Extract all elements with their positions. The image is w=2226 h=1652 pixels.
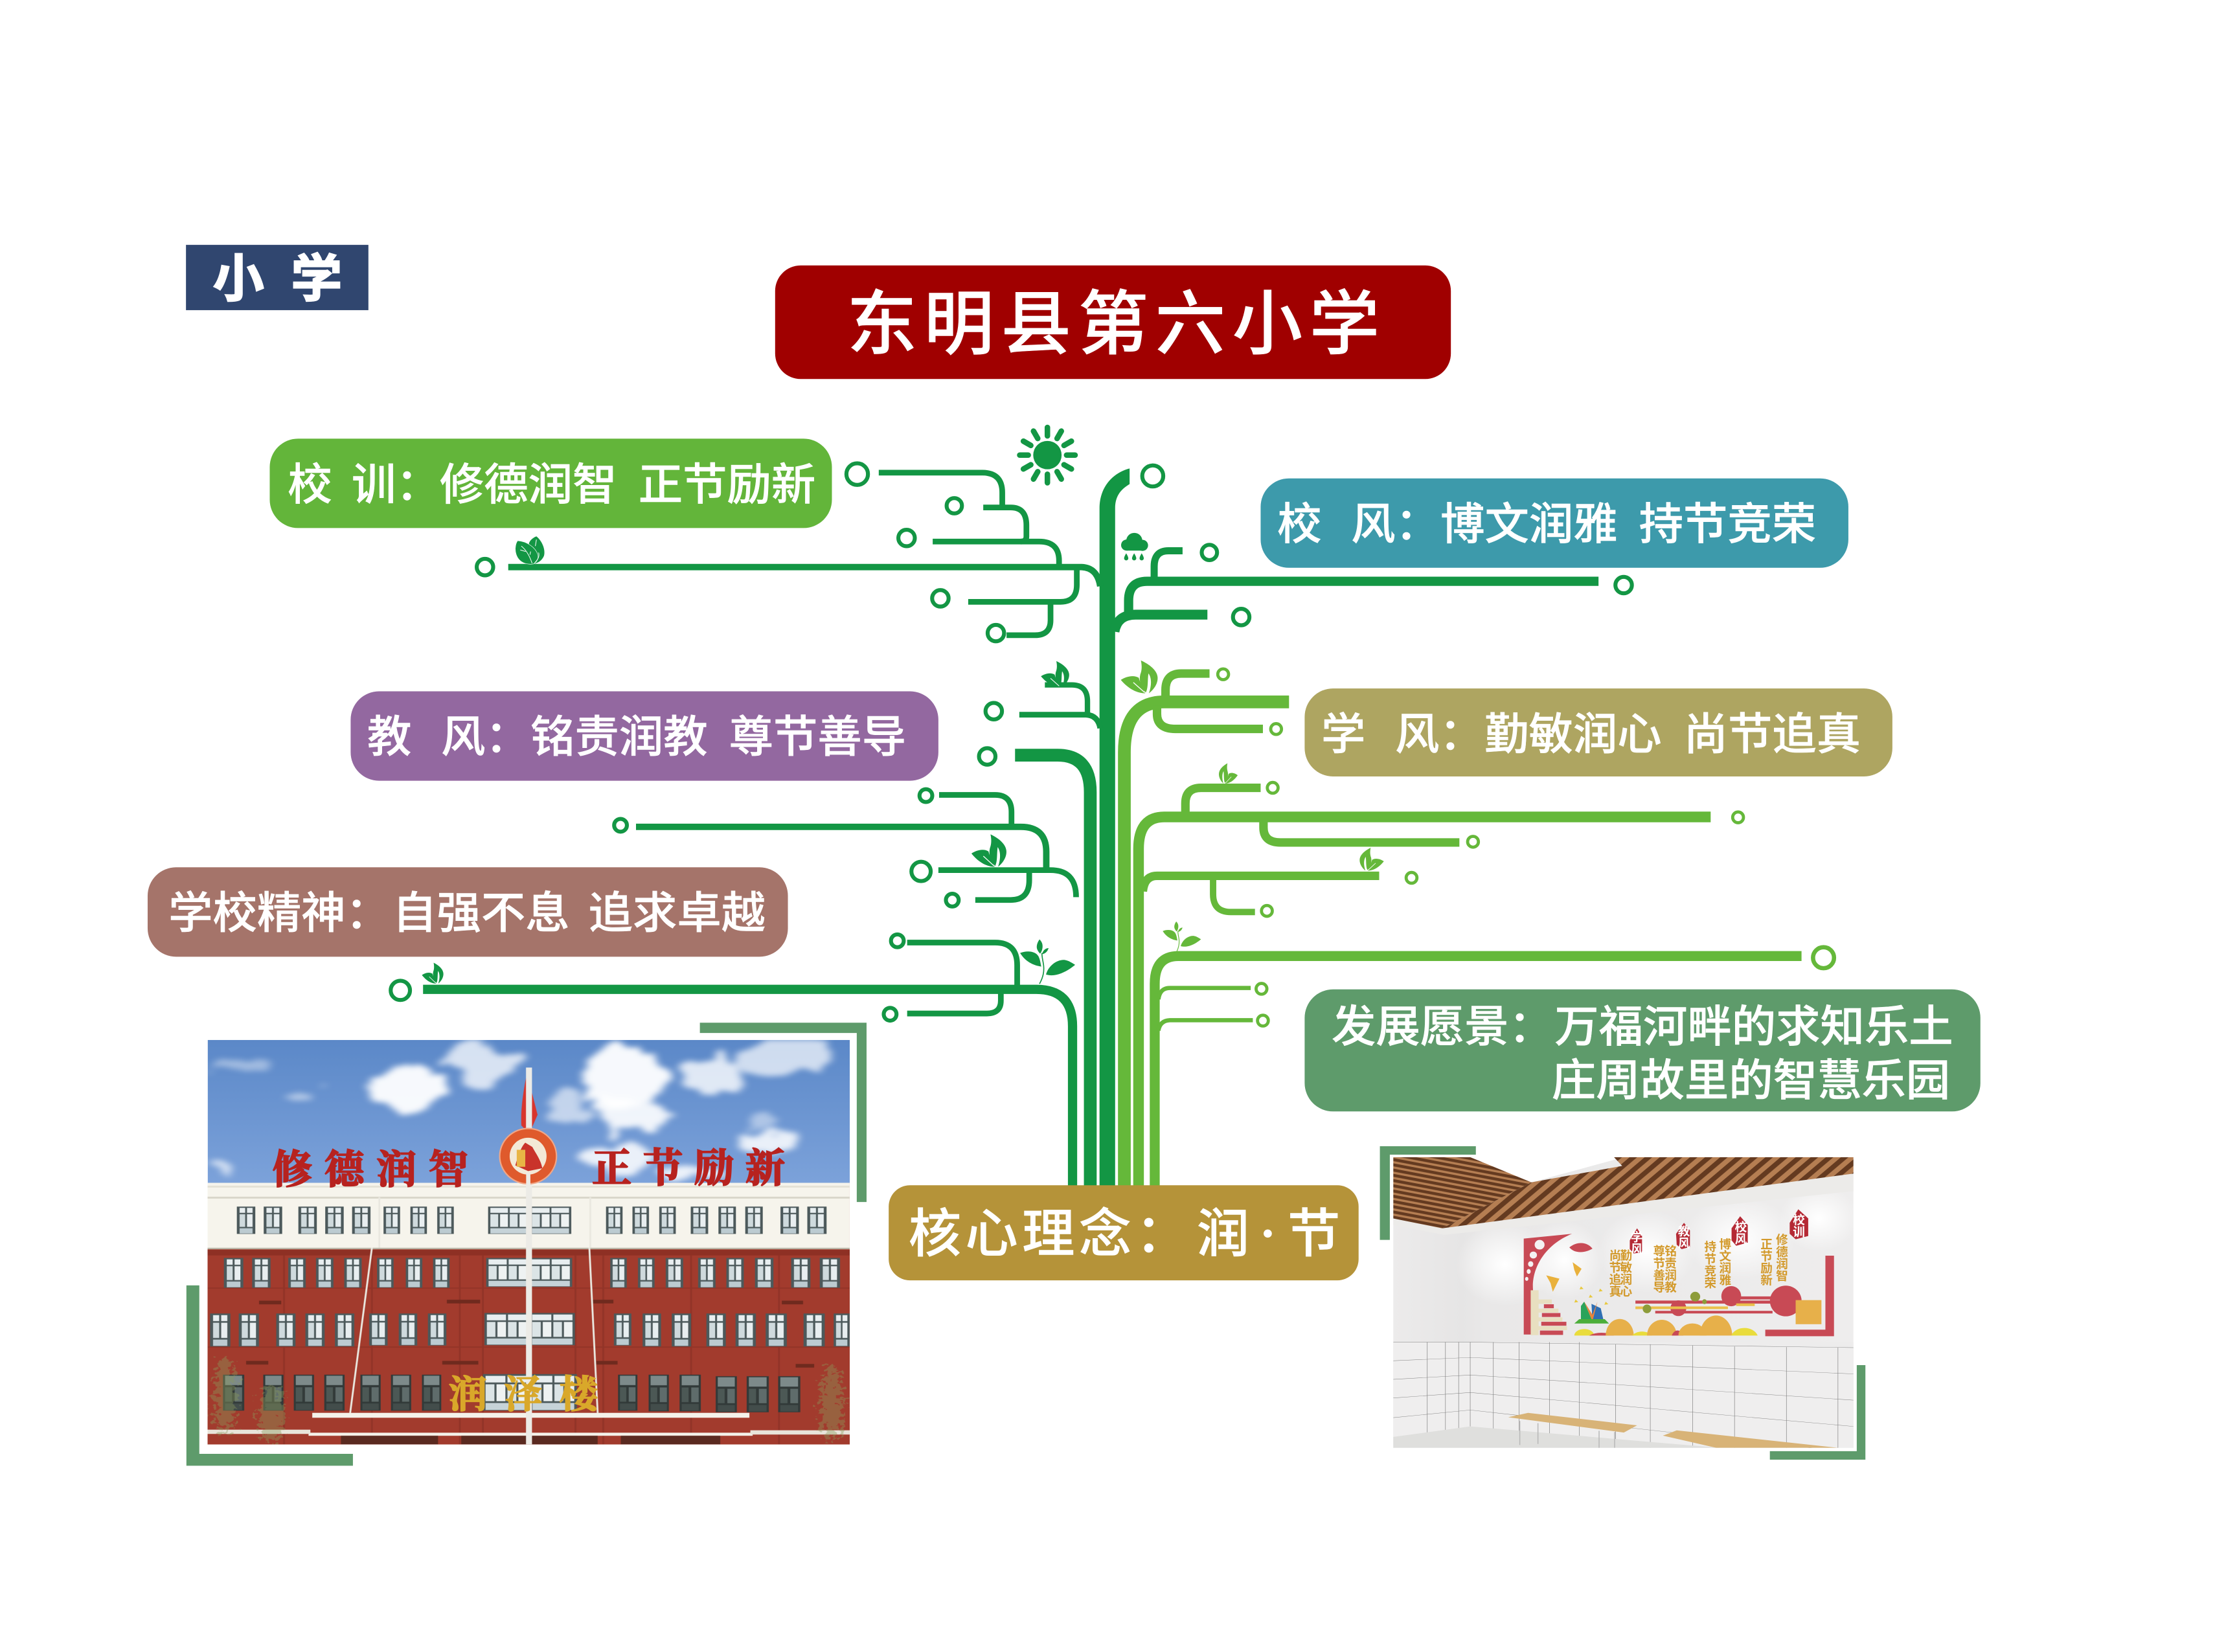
- photo sign: plates and vertical slogans: 校训: [1791, 1214, 1805, 1238]
- label: study style: 学: [1321, 710, 1365, 759]
- photo sign: building name: 润泽楼: [449, 1373, 615, 1416]
- label: school motto: 校: [288, 460, 332, 510]
- label: school ethos: 持节竞荣: [1639, 500, 1816, 549]
- photo sign: plates and vertical slogans: [1607, 1214, 1805, 1297]
- label: school spirit: [148, 867, 788, 956]
- label: teaching style: 教: [367, 713, 411, 762]
- label: teaching style: [350, 691, 938, 781]
- label: teaching style: 铭责润教: [530, 713, 708, 762]
- frame: building photo top right: [700, 1023, 867, 1202]
- label: study style: 风：: [1395, 710, 1484, 759]
- label: school ethos: [1260, 479, 1848, 568]
- label: development vision: 发展愿景：: [1332, 1002, 1553, 1052]
- photo sign: plates and vertical slogans: 修德润智: [1775, 1234, 1788, 1282]
- label: development vision: 万福河畔的求知乐土: [1554, 1002, 1953, 1052]
- label: study style: 尚节追真: [1684, 710, 1861, 759]
- label: study style: 勤敏润心: [1484, 710, 1662, 759]
- photo sign: plates and vertical slogans: 学风: [1630, 1230, 1643, 1255]
- icon: sun: [1019, 427, 1075, 482]
- label: core concept: 润: [1197, 1205, 1249, 1263]
- label: school motto: 修德润智: [440, 460, 617, 510]
- label: study style: [1304, 688, 1892, 776]
- photo sign: plates and vertical slogans: 博文润雅: [1718, 1238, 1731, 1286]
- label: school motto: 正节励新: [639, 460, 815, 510]
- tree: light green trunks and branches: [1124, 673, 1802, 1186]
- photo sign: plates and vertical slogans: 校风: [1733, 1220, 1747, 1245]
- icon: rain cloud: [1121, 533, 1148, 560]
- label: core concept: [889, 1185, 1359, 1280]
- label: school motto: [269, 438, 832, 528]
- label: school spirit: 追求卓越: [589, 889, 766, 938]
- label: teaching style: 风：: [441, 713, 530, 762]
- label: core concept: 核心理念：: [909, 1205, 1192, 1263]
- photo: culture wall: [1393, 1157, 1858, 1453]
- title: 东明县第六小学: [847, 285, 1387, 363]
- label: core concept: 节: [1288, 1205, 1340, 1263]
- photo sign: plates and vertical slogans: 持节竞荣: [1703, 1241, 1716, 1289]
- photo sign: motto characters: [273, 1147, 797, 1192]
- photo sign: motto characters: 修德润智: [273, 1148, 481, 1192]
- label: school ethos: 博文润雅: [1440, 500, 1618, 549]
- label: school spirit: 学校精神：: [168, 889, 390, 938]
- title: [775, 266, 1451, 379]
- label: development vision: [1304, 990, 1981, 1111]
- photo sign: plates and vertical slogans: 勤敏润心: [1618, 1249, 1632, 1297]
- label: teaching style: 尊节善导: [729, 713, 906, 762]
- label: school ethos: 风：: [1351, 500, 1440, 549]
- label: school ethos: 校: [1277, 500, 1322, 549]
- photo sign: plates and vertical slogans: 教风: [1677, 1225, 1690, 1250]
- photo: school building: [207, 1038, 850, 1444]
- photo sign: plates and vertical slogans: 尚节追真: [1607, 1249, 1621, 1297]
- tree: dark green trunks and branches: [423, 468, 1598, 1186]
- photo sign: motto characters: 正节励新: [592, 1147, 797, 1191]
- photo sign: plates and vertical slogans: 尊节善导: [1652, 1245, 1665, 1293]
- light branch end circles: [1218, 669, 1834, 1026]
- branch end circles: [391, 463, 1632, 1021]
- photo sign: plates and vertical slogans: 正节励新: [1759, 1238, 1773, 1286]
- photo sign: plates and vertical slogans: 铭责润教: [1663, 1245, 1677, 1293]
- icon: leaves on branches: [422, 536, 1384, 984]
- section tag: primary school: 小学: [213, 251, 369, 308]
- frame: building photo bottom left: [187, 1285, 353, 1465]
- label: school spirit: 自强不息: [392, 889, 570, 938]
- label: school motto: 训：: [352, 460, 440, 510]
- photo sign: logo: [500, 1129, 556, 1185]
- frame: wall photo bottom right: [1770, 1365, 1865, 1460]
- label: development vision: 庄周故里的智慧乐园: [1552, 1056, 1950, 1105]
- frame: wall photo top left: [1380, 1146, 1476, 1240]
